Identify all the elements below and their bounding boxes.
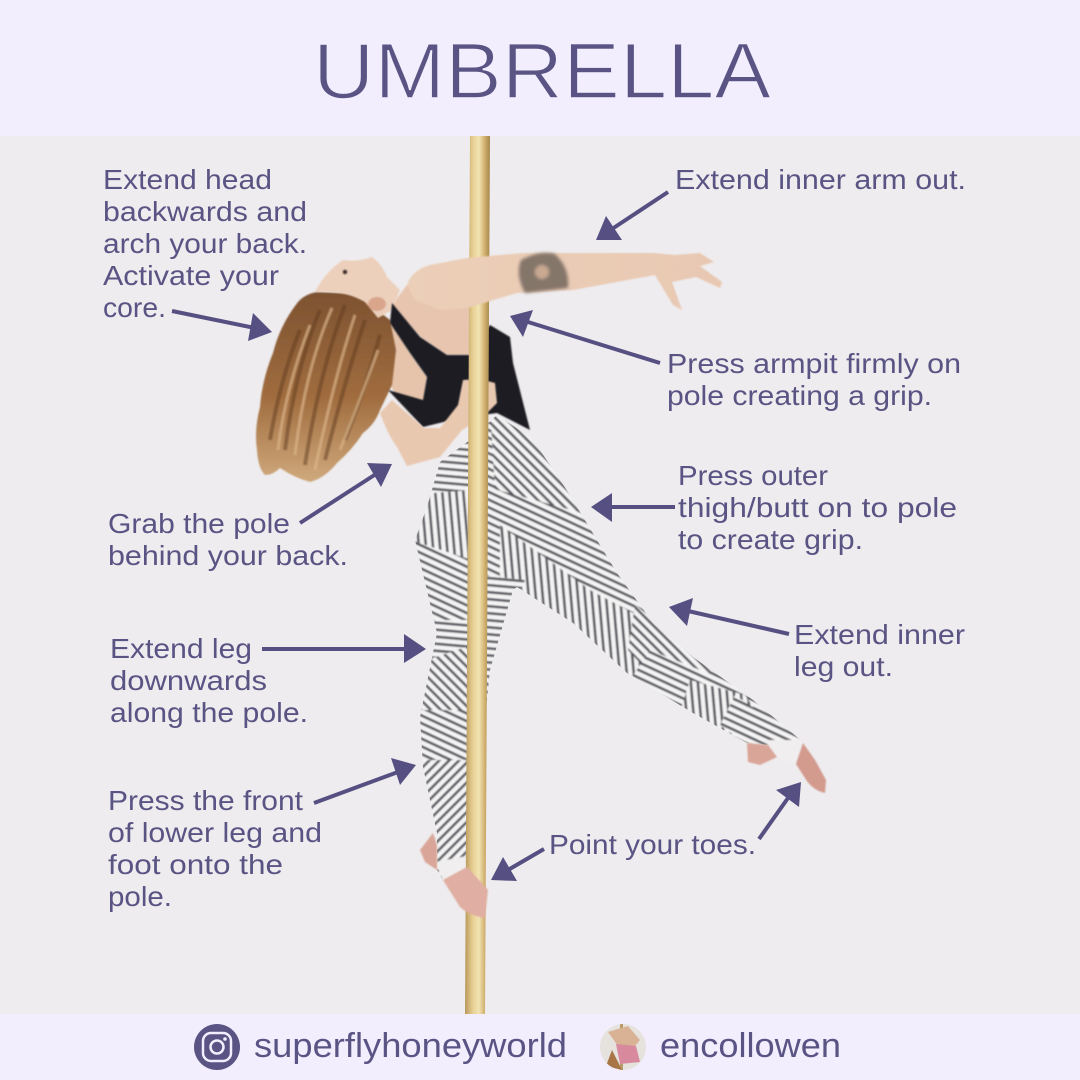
lower arm and hand gripping pole <box>380 379 497 466</box>
text: outer thigh: Press outer <box>678 460 828 491</box>
text: inner leg <box>794 619 965 682</box>
text: front of lower leg: foot onto the <box>108 849 283 880</box>
arrow: to lower leg <box>262 634 426 663</box>
arrow: to arm <box>596 192 668 240</box>
hair <box>256 292 396 482</box>
text: extend head: Activate your <box>103 260 279 291</box>
callout: inner arm <box>596 164 966 240</box>
text: extend head: backwards and <box>103 196 307 227</box>
arrow: to head <box>172 311 272 341</box>
text: extend leg <box>110 633 308 728</box>
callout: extend head <box>103 164 307 341</box>
callout: outer thigh <box>591 460 957 555</box>
callout: point your toes <box>491 782 801 881</box>
text: armpit: Press armpit firmly on <box>667 348 961 379</box>
callout: extend leg <box>110 633 426 728</box>
text: inner leg: Extend inner <box>794 619 965 650</box>
leggings <box>415 416 800 880</box>
figure: pole dancer in umbrella pose <box>256 136 826 1014</box>
instagram handle: superflyhoneyworld <box>254 1027 567 1065</box>
head <box>315 257 400 318</box>
black top <box>388 303 530 430</box>
torso skin and inner shoulder <box>392 285 472 355</box>
text: front of lower leg: of lower leg and <box>108 817 322 848</box>
title: UMBRELLA <box>313 26 771 115</box>
callout: armpit <box>510 310 961 411</box>
arrow: to armpit <box>510 310 660 363</box>
text: front of lower leg <box>108 785 322 912</box>
text: extend leg: downwards <box>110 665 267 696</box>
text: grab the pole: behind your back. <box>108 540 348 571</box>
text: inner leg: leg out. <box>794 651 893 682</box>
arrow: to thigh <box>591 493 675 522</box>
pole <box>465 136 490 1014</box>
arrow: to lower foot <box>491 849 544 881</box>
text: extend head: arch your back. <box>103 228 307 259</box>
arrow: to inner leg <box>669 598 789 634</box>
text: extend head: Extend head <box>103 164 272 195</box>
text: extend leg: Extend leg <box>110 633 252 664</box>
text: extend head <box>103 164 307 323</box>
icon: instagram <box>194 1024 240 1070</box>
text: front of lower leg: Press the front <box>108 785 303 816</box>
text: armpit <box>667 348 961 411</box>
avatar <box>600 1024 646 1070</box>
text: inner arm: Extend inner arm out. <box>675 164 966 195</box>
text: extend head: core. <box>103 292 166 323</box>
feet <box>420 743 826 918</box>
back upper arm skin <box>378 318 427 402</box>
text: point your toes: Point your toes. <box>549 829 756 860</box>
callout: grab the pole <box>108 463 392 571</box>
text: outer thigh: to create grip. <box>678 524 863 555</box>
arrow: to shin <box>314 758 416 803</box>
text: extend leg: along the pole. <box>110 697 308 728</box>
extended arm and hand <box>407 253 722 310</box>
tattoo <box>519 253 568 293</box>
text: front of lower leg: pole. <box>108 881 172 912</box>
text: outer thigh <box>678 460 957 555</box>
text: armpit: pole creating a grip. <box>667 380 932 411</box>
header band <box>0 0 1080 136</box>
second handle: encollowen <box>660 1027 841 1065</box>
callout: front of lower leg <box>108 758 416 912</box>
arrow: to upper foot <box>759 782 801 839</box>
callout: inner leg <box>669 598 965 682</box>
arrow: to arm <box>300 463 392 523</box>
text: outer thigh: thigh/butt on to pole <box>678 492 957 523</box>
text: grab the pole <box>108 508 348 571</box>
text: grab the pole: Grab the pole <box>108 508 290 539</box>
footer band <box>0 1014 1080 1080</box>
